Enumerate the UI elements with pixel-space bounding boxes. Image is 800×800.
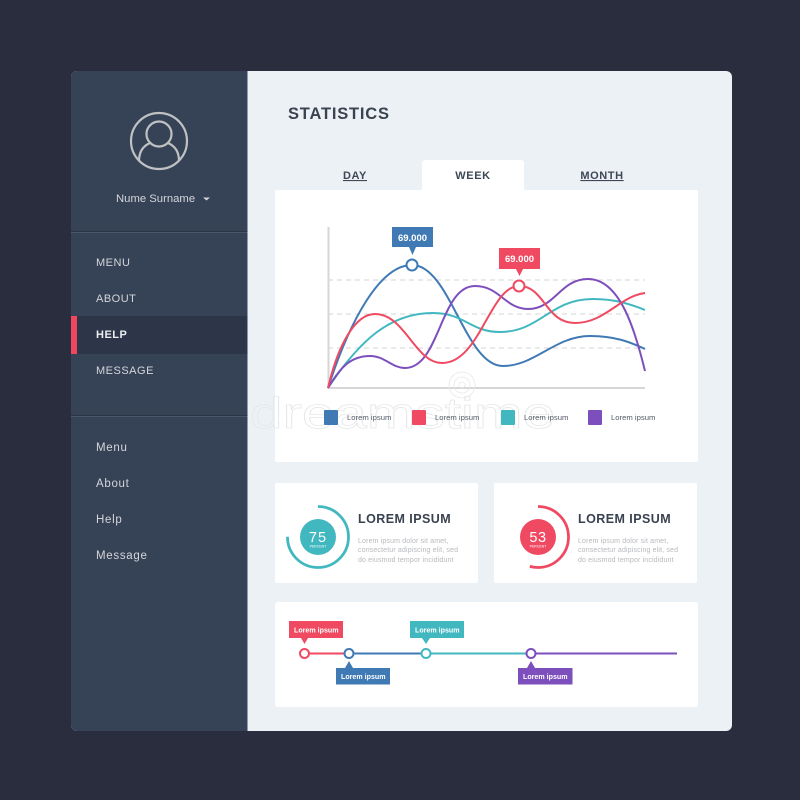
secondary menu: About — [96, 478, 130, 490]
card text: do eiusmod tempor incididunt — [578, 557, 674, 564]
card text: Lorem ipsum dolor sit amet, — [578, 538, 668, 545]
timeline label: red: Lorem ipsum — [294, 626, 339, 634]
panel: line chart — [250, 190, 698, 462]
legend: Lorem ipsum — [524, 413, 568, 422]
card text: consectetur adipiscing elit, sed — [578, 547, 678, 554]
primary menu: HELP — [96, 329, 127, 341]
legend: Lorem ipsum — [435, 413, 479, 422]
tabs: WEEK — [455, 170, 491, 182]
tooltip: red: 69.000 — [505, 254, 534, 265]
primary menu: MESSAGE — [96, 365, 154, 377]
card heading: LOREM IPSUM — [578, 512, 671, 526]
timeline label: blue: Lorem ipsum — [341, 673, 386, 681]
timeline label: teal — [410, 621, 464, 644]
donut: 53 percent — [508, 506, 568, 568]
panel: red stat card — [494, 483, 697, 583]
watermark — [250, 372, 555, 438]
user name: Nume Surname — [116, 193, 195, 205]
card text: Lorem ipsum dolor sit amet, — [358, 538, 448, 545]
primary menu — [96, 257, 154, 377]
series: blue — [328, 265, 645, 388]
donut: 75 percent: PERCENT — [310, 544, 327, 548]
series: teal — [328, 299, 645, 388]
secondary menu: Menu — [96, 442, 128, 454]
title: STATISTICS — [288, 105, 390, 123]
main panel — [71, 71, 732, 731]
chart grid lines — [328, 280, 645, 348]
sidebar — [71, 71, 248, 731]
series: purple — [328, 279, 645, 388]
timeline label: blue — [336, 661, 390, 684]
panel: teal stat card — [275, 483, 478, 583]
tabs: DAY — [343, 170, 367, 182]
card text — [578, 538, 678, 564]
icon: user avatar — [131, 113, 187, 169]
tooltip: red — [499, 248, 540, 276]
donut: 75 percent — [288, 506, 348, 568]
marker: red peak — [514, 280, 524, 292]
primary menu: MENU — [96, 257, 130, 269]
card text — [358, 538, 458, 564]
timeline label: teal: Lorem ipsum — [415, 626, 460, 634]
card text: do eiusmod tempor incididunt — [358, 557, 454, 564]
tooltip: blue: 69.000 — [398, 233, 427, 244]
legend: Lorem ipsum — [347, 413, 391, 422]
watermark: dreamstime — [250, 389, 555, 438]
secondary menu: Help — [96, 514, 122, 526]
marker: blue peak — [406, 260, 418, 270]
tabs — [343, 160, 624, 190]
primary menu: ABOUT — [96, 293, 136, 305]
card heading: LOREM IPSUM — [358, 512, 451, 526]
timeline label: purple: Lorem ipsum — [523, 673, 568, 681]
timeline nodes — [300, 649, 536, 658]
series: red — [328, 286, 645, 388]
timeline label: purple — [518, 661, 572, 684]
tooltip: blue — [392, 227, 433, 255]
legend: Lorem ipsum — [611, 413, 655, 422]
donut: 53 percent: PERCENT — [530, 544, 547, 548]
secondary menu: Message — [96, 550, 148, 562]
active row highlight — [71, 316, 248, 354]
card text: consectetur adipiscing elit, sed — [358, 547, 458, 554]
donut: 53 percent: 53 — [529, 530, 547, 546]
chart axes — [328, 227, 645, 388]
donut: 75 percent: 75 — [309, 530, 327, 546]
panel: timeline — [275, 602, 698, 707]
tabs: MONTH — [580, 170, 624, 182]
secondary menu — [96, 442, 148, 562]
timeline label: red — [289, 621, 343, 644]
legend — [324, 410, 655, 425]
icon: dropdown caret — [203, 198, 210, 200]
timeline segments — [304, 652, 677, 654]
